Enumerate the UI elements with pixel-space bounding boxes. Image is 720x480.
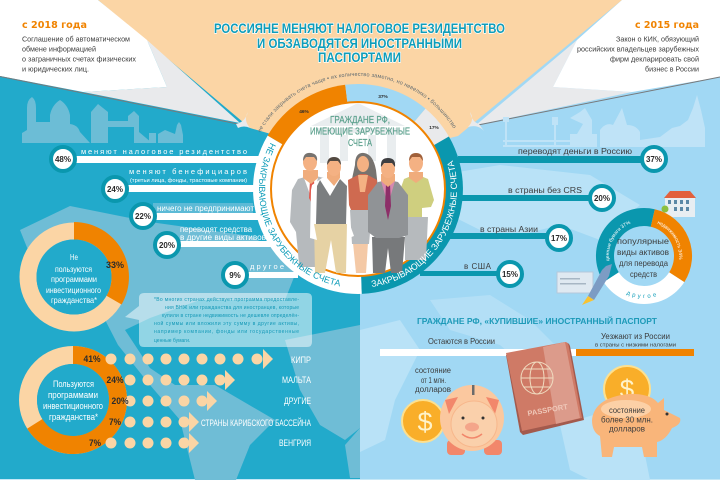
stat row: 9%: другое (250, 262, 284, 271)
dot row: Hungary (89, 433, 311, 453)
title: ПАСПОРТАМИ (318, 49, 401, 65)
ring caption: arc text: не стали закрывать счета чаще ▪ их количество заметно, но невелико ▪ большинство (258, 72, 456, 132)
stat row: 20%: 20% (159, 241, 175, 250)
donut: popular asset types: средств (630, 270, 657, 279)
skyline: right landmarks (503, 95, 705, 147)
icon: coin and piggy bank side: $ (620, 374, 635, 404)
stat row: 22%: 22% (135, 212, 151, 221)
icon: passport: PASSPORT (527, 402, 569, 418)
panel: 2018 callout (0, 0, 250, 128)
scale: stay or leave: в страны с низкими налогами (595, 342, 676, 348)
icon: coin and piggy bank front (402, 385, 504, 455)
text: from 1 million: от 1 млн. (421, 376, 446, 385)
peach title background (98, 0, 622, 160)
stat row: 15% USA: 15% (502, 270, 518, 279)
scale: stay or leave: Уезжают из России (601, 331, 670, 341)
2018 heading: с 2018 года (22, 20, 87, 31)
stat row: 22% (131, 204, 263, 228)
donut: not using citizenship programmes: инвестиционного (46, 285, 101, 295)
donut: not using citizenship programmes: гражданства* (51, 295, 98, 305)
stat row: 20% CRS: в страны без CRS (508, 186, 582, 195)
callout: investment citizenship note: купили в стране недвижимость не дешевле определён- (162, 313, 299, 319)
stat row: 15% USA (420, 262, 522, 286)
text: from 1 million: долларов (415, 385, 451, 394)
2015 body text: бизнес в России (645, 64, 699, 74)
donut: popular asset types (596, 208, 692, 304)
donut: popular asset types: для перевода (619, 259, 669, 268)
donut: not using citizenship programmes: пользуются (55, 264, 92, 274)
dot row: Malta: 24% (106, 375, 124, 385)
stat row: 15% USA: в США (464, 262, 492, 271)
stat row: 24%: 24% (107, 185, 123, 194)
donut: popular asset types: виды активов (617, 248, 669, 257)
heading: bought passport: ГРАЖДАНЕ РФ, «КУПИВШИЕ» ИНОСТРАННЫЙ ПАСПОРТ (417, 315, 658, 326)
callout: investment citizenship note (125, 293, 312, 347)
stat row: 24% (103, 167, 259, 201)
title: РОССИЯНЕ МЕНЯЮТ НАЛОГОВОЕ РЕЗИДЕНТСТВО (214, 20, 505, 36)
stat row: 48%: 48% (55, 155, 71, 164)
person: man in grey suit (290, 153, 330, 267)
donut: using citizenship programmes: программами (48, 390, 98, 400)
stat row: 48% (51, 147, 260, 171)
dot row: Other (112, 391, 311, 411)
dot row: Other: ДРУГИЕ (284, 396, 311, 406)
dot row: Malta: МАЛЬТА (282, 375, 311, 385)
text: over 30 million: более 30 млн. (601, 416, 653, 424)
2018 body text (22, 34, 136, 74)
2015 heading: с 2015 года (635, 20, 699, 31)
dot row: Other: 20% (112, 396, 128, 406)
text: from 1 million: состояние (415, 366, 452, 375)
person: man in sweater (398, 153, 434, 260)
stat row: 20%: переводят средства (180, 225, 253, 234)
stat row: 20% CRS: 20% (594, 194, 610, 203)
donut: popular asset types: популярные (617, 237, 670, 246)
2018 body text: о заграничных счетах физических (22, 54, 136, 64)
donut: not using citizenship programmes (28, 222, 129, 323)
label: not closing foreign accounts: НЕ ЗАКРЫВАЮЩИЕ ЗАРУБЕЖНЫЕ СЧЕТА (259, 143, 340, 286)
circle heading: ИМЕЮЩИЕ ЗАРУБЕЖНЫЕ (310, 126, 410, 138)
icon: passport (506, 342, 584, 435)
2015 body text (577, 34, 699, 74)
scale: stay or leave (380, 331, 694, 356)
stat row: 20% CRS (462, 186, 614, 210)
donut: using citizenship programmes: гражданства* (49, 412, 98, 422)
dot row: Cyprus: 41% (84, 354, 100, 364)
icon: cheque and pen (557, 264, 612, 305)
person: man in vest (310, 157, 354, 273)
stat row: 17% Asia: 17% (551, 234, 567, 243)
2018 body text: и юридических лиц. (22, 64, 89, 74)
2018 body text: Соглашение об автоматическом (22, 34, 130, 44)
dot row: Malta (106, 370, 311, 390)
callout: investment citizenship note: *Во многих странах действует программа предоставле- (154, 296, 299, 303)
callout: investment citizenship note: например компании, фонды или государственные (154, 329, 299, 335)
stat row: 24%: (третьи лица, фонды, трастовые компании) (130, 178, 247, 184)
stat row: 48%: меняют налоговое резидентство (81, 147, 247, 156)
label: closing foreign accounts: ЗАКРЫВАЮЩИЕ ЗАРУБЕЖНЫЕ СЧЕТА (371, 160, 457, 287)
dot row: Caribbean (109, 412, 311, 432)
skyline: left landmarks (22, 97, 183, 143)
title: И ОБЗАВОДЯТСЯ ИНОСТРАННЫМИ (257, 35, 462, 51)
building backdrop (311, 103, 405, 163)
stat row: 37% (458, 147, 666, 171)
stat row: 17% Asia: в страны Азии (480, 225, 538, 234)
stat row: 24%: меняют бенефициаров (129, 167, 247, 176)
2015 body text: российских владельцев зарубежных (577, 44, 699, 54)
circle heading: СЧЕТА (348, 138, 372, 149)
2015 body text: Закон о КИК, обязующий (616, 34, 699, 44)
text: over 30 million: состояние (609, 406, 646, 415)
ring: account holders outer chart (253, 84, 463, 294)
icon: coin and piggy bank side (592, 366, 680, 457)
donut: not using citizenship programmes: Не (70, 252, 78, 262)
donut: popular asset types: недвижимость 34% (657, 221, 683, 260)
donut: using citizenship programmes (27, 346, 127, 454)
stat row: 22%: ничего не предпринимают (157, 204, 254, 213)
stat row: 37%: переводят деньги в Россию (518, 147, 632, 156)
dot row: Hungary: 7% (89, 438, 101, 448)
donut: not using citizenship programmes: программами (51, 274, 97, 284)
scale: stay or leave: Остаются в России (428, 336, 495, 346)
text: from 1 million (415, 366, 452, 394)
stat row: 17% Asia (438, 225, 571, 250)
stat row: 20% (155, 225, 272, 257)
person: man in dark suit (368, 158, 408, 273)
callout: investment citizenship note: ценные бумаги. (154, 338, 190, 344)
text: over 30 million: долларов (609, 424, 645, 434)
text: over 30 million (601, 406, 653, 434)
dot row: Caribbean: СТРАНЫ КАРИБСКОГО БАССЕЙНА (201, 417, 311, 428)
dot row: Cyprus (84, 349, 311, 369)
dot row: Hungary: ВЕНГРИЯ (279, 438, 311, 448)
centre circle with people (271, 102, 445, 276)
circle heading: ГРАЖДАНЕ РФ, (330, 115, 390, 126)
stat row: 9%: 9% (229, 271, 241, 280)
donut: not using citizenship programmes: 33% (106, 260, 124, 270)
donut: popular asset types: ценные бумаги 37% (606, 220, 630, 261)
stat row: 9% (223, 262, 298, 287)
icon: building (662, 191, 696, 217)
callout: investment citizenship note: ния ВНЖ или гражданства для иностранцев, которые (165, 305, 299, 311)
17% label: 17% (429, 125, 440, 131)
callout: investment citizenship note: ной суммы или вложили эту сумму в другие активы, (154, 320, 299, 327)
title (214, 20, 505, 65)
dot row: Cyprus: КИПР (291, 355, 311, 365)
stat row: 20%: в другие виды активов (180, 233, 266, 242)
2015 body text: фирм декларировать свой (610, 54, 699, 64)
circle heading (310, 115, 410, 149)
donut: using citizenship programmes: Пользуются (53, 379, 94, 389)
37% label: 37% (378, 94, 389, 100)
donut: popular asset types: другое (626, 292, 656, 299)
person: woman (348, 153, 378, 273)
stat row: 37%: 37% (646, 155, 662, 164)
icon: coin and piggy bank front: $ (417, 407, 433, 437)
46% label: 46% (299, 109, 310, 115)
panel: 2015 callout (468, 0, 720, 131)
donut: using citizenship programmes: инвестиционного (43, 401, 103, 411)
2018 body text: обмене информацией (22, 44, 96, 54)
dot row: Caribbean: 7% (109, 417, 121, 427)
